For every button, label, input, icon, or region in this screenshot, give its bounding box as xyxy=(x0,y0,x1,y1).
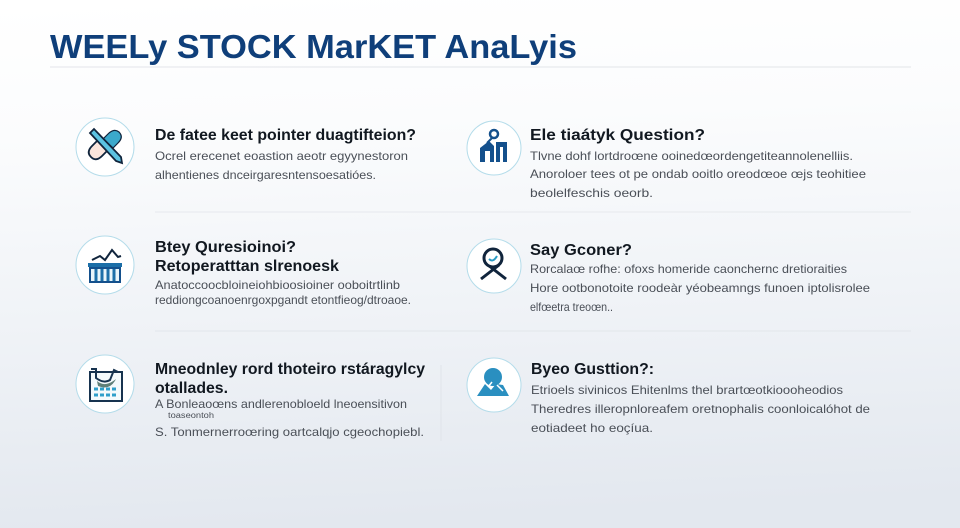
heading: Btey Quresioinoi? xyxy=(155,239,296,256)
body text: Anoroloer tees ot pe ondab ooitlo oreodœoe œjs teohitiee xyxy=(530,167,866,181)
icon: magnifier xyxy=(467,239,521,293)
body text xyxy=(155,149,408,182)
heading: Ele tiaátyk Question? xyxy=(530,127,705,144)
panel: row 2 left xyxy=(76,236,411,307)
body text: alhentienes dnceirgaresntensoesatióes. xyxy=(155,168,376,182)
body text: Rorcalaœ rofhe: ofoxs homeride caonchernc dretioraities xyxy=(530,262,847,276)
body text xyxy=(530,149,866,200)
panel: row 2 right xyxy=(467,239,870,314)
title: WEELy STOCK MarKET AnaLyis xyxy=(50,28,577,65)
body text xyxy=(531,383,870,435)
body text xyxy=(530,262,870,314)
body text: Etrioels sivinicos Ehitenlms thel brartœotkioooheodios xyxy=(531,383,843,397)
body text: Hore ootbonotoite roodeàr yéobeamngs funoen iptolisrolee xyxy=(530,281,870,295)
panel: row 3 right xyxy=(467,358,870,435)
heading xyxy=(155,361,425,397)
panel: row 3 left xyxy=(76,355,425,439)
body text: elfœetra treoœn.. xyxy=(530,300,613,314)
heading: De fatee keet pointer duagtifteion? xyxy=(155,127,416,144)
body text xyxy=(155,397,424,439)
icon: building chart xyxy=(467,121,521,175)
body text: Ocrel erecenet eoastion aeotr egyynestoron xyxy=(155,149,408,163)
body text: reddiongcoanoenrgoxpgandt etontfieog/dtroaoe. xyxy=(155,293,411,307)
heading: Byeo Gusttion?: xyxy=(531,361,654,378)
heading: Say Gconer? xyxy=(530,242,632,259)
panel: row 1 right xyxy=(467,121,866,200)
body text: toaseontoh xyxy=(168,411,214,420)
icon: chart over columns xyxy=(76,236,134,294)
body text: Anatoccoocbloineiohbioosioiner ooboitrtlinb xyxy=(155,278,400,292)
body text: Tlvne dohf lortdroœne ooinedœordengetiteannolenelliis. xyxy=(530,149,853,163)
icon: calendar chart xyxy=(76,355,134,413)
heading xyxy=(155,239,339,275)
body text: S. Tonmernerroœring oartcalqjo cgeochopiebl. xyxy=(155,425,424,439)
heading: Retoperatttan slrenoesk xyxy=(155,258,339,275)
body text: A Bonleaoœns andlerenobloeld lneoensitivon xyxy=(155,397,407,411)
panel: row 1 left xyxy=(76,118,416,182)
body text: Theredres illeropnloreafem oretnophalis coonloicalóhot de xyxy=(531,402,870,416)
body text: eotiadeet ho eoçíua. xyxy=(531,421,653,435)
heading: otallades. xyxy=(155,380,228,397)
body text xyxy=(155,278,411,307)
body text: beolelfeschis oeorb. xyxy=(530,186,653,200)
icon: crossed pill and pencil xyxy=(76,118,134,176)
heading: Mneodnley rord thoteiro rstáragylcy xyxy=(155,361,425,378)
icon: person with blue shape xyxy=(467,358,521,412)
